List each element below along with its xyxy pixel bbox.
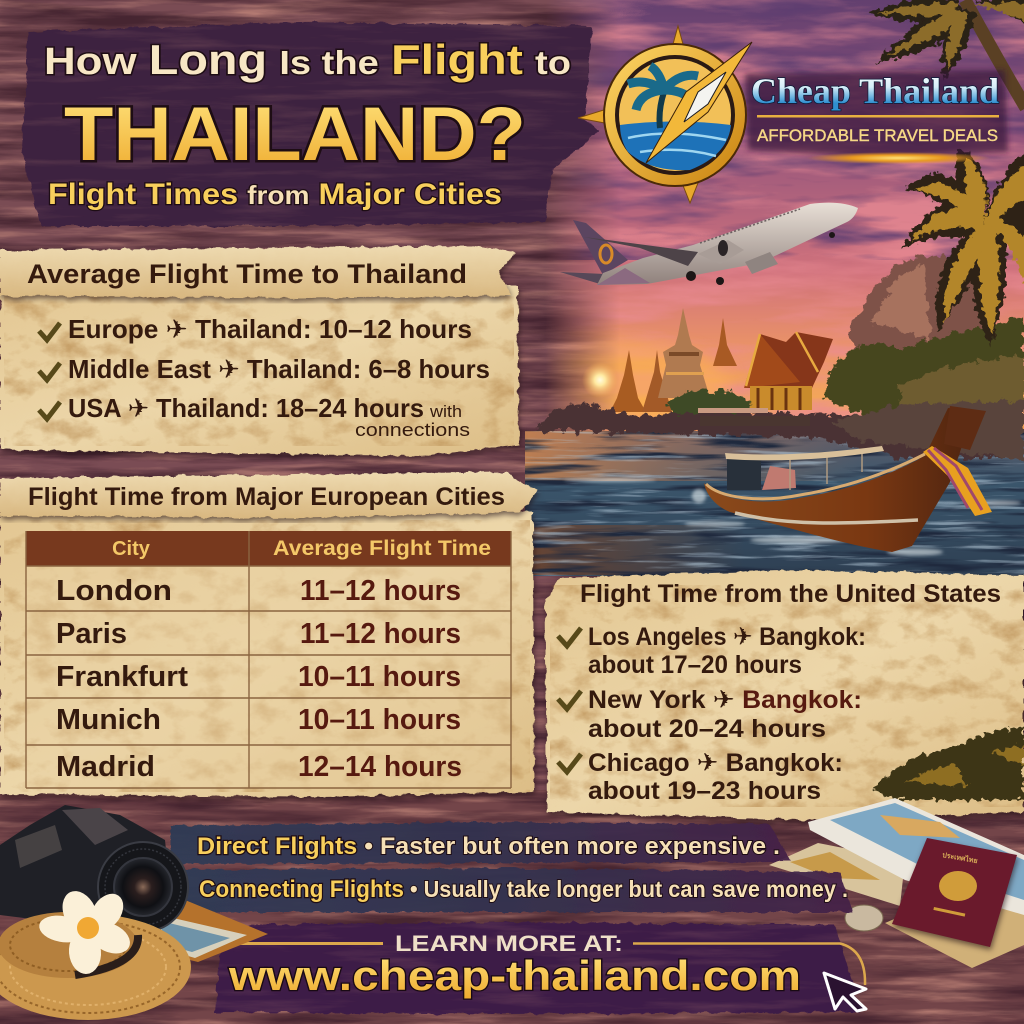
background: sunset sky (0, 0, 1024, 440)
parchment (0, 285, 519, 456)
panel: major European cities (0, 472, 537, 797)
rock shoreline (535, 404, 1024, 458)
item: Los Angeles (588, 622, 866, 679)
compass badge (578, 26, 752, 203)
left rule (232, 942, 383, 945)
temple spires (610, 308, 737, 412)
icon: palm tree right (900, 148, 1024, 346)
title line 2: THAILAND? (64, 92, 526, 177)
right rule with curve (633, 944, 865, 985)
palm on badge (660, 92, 664, 128)
fuselage (597, 203, 858, 285)
bottom wooden table (0, 790, 1024, 1024)
heading banner (0, 246, 516, 298)
band: direct flights (170, 822, 790, 864)
icon: longtail boat (704, 406, 992, 552)
title line 3: Flight Times from Major Cities (48, 178, 502, 211)
row: London: 11–12 hours (300, 575, 461, 607)
item: New York (588, 685, 862, 743)
tagline rule (757, 115, 999, 118)
table header (26, 531, 511, 566)
panel: United States flights (545, 570, 1024, 820)
background: weathered wood planks on the left (0, 0, 620, 800)
shore rocks (830, 400, 1024, 460)
title backdrop (22, 22, 600, 226)
sea foam (564, 478, 1021, 556)
row: Madrid (56, 751, 462, 783)
checks (39, 323, 60, 419)
note: with connections: connections (355, 420, 470, 440)
heading: Flight Time from the United States (580, 580, 1001, 608)
sea (525, 431, 1024, 576)
icon: passport: ประเทศไทย (942, 850, 978, 865)
wordmark backdrop (745, 70, 1008, 158)
note: with connections: with (429, 402, 462, 421)
plant foliage (872, 728, 1024, 800)
map booklet (808, 798, 1024, 915)
icon: camera (0, 805, 188, 932)
limestone cliff and jungle (825, 254, 1024, 460)
parchment (0, 512, 534, 797)
row: Paris: 11–12 hours (300, 618, 461, 650)
icon: straw hat (0, 912, 191, 1020)
row: Madrid: Madrid (56, 751, 155, 783)
lower map (885, 895, 1024, 968)
panel: average flight time (0, 246, 519, 456)
camera, hat and flower (0, 805, 268, 1020)
icon: plumeria flower (37, 885, 135, 975)
learn more panel (215, 920, 866, 1016)
maps, tablet and passport (769, 798, 1024, 968)
item: Chicago: Chicago ✈ Bangkok: (588, 748, 843, 777)
band: connecting flights (175, 868, 852, 912)
low trees (668, 390, 752, 420)
folded map (769, 843, 905, 906)
row: Frankfurt: Frankfurt (56, 661, 188, 693)
backdrop (215, 922, 860, 1014)
row: Frankfurt: 10–11 hours (298, 661, 461, 693)
title panel (20, 20, 605, 230)
parchment (545, 570, 1024, 820)
far wing (584, 237, 698, 266)
tail fin (573, 220, 628, 275)
tip: connecting: Connecting Flights • Usually take longer but can save money . (199, 876, 848, 903)
stilted pier (698, 408, 768, 413)
item: Middle East: Middle East ✈ Thailand: 6–8 hours (68, 354, 490, 385)
row: Paris: Paris (56, 618, 127, 650)
item: New York: about 20–24 hours (588, 715, 826, 743)
ribbons (923, 446, 992, 516)
row: London: London (56, 575, 172, 607)
row: London (56, 575, 461, 607)
item: Chicago (588, 748, 843, 805)
heading: Average Flight Time to Thailand (27, 259, 467, 289)
orange cloth (150, 900, 268, 962)
row: Munich: Munich (56, 704, 161, 736)
tagline: AFFORDABLE TRAVEL DEALS (757, 126, 998, 145)
item: Los Angeles: Los Angeles ✈ Bangkok: (588, 622, 866, 651)
distant temples and shoreline (535, 308, 1024, 458)
title line 1: How Long Is the Flight to (44, 36, 571, 83)
table (26, 531, 511, 788)
table: City (112, 538, 151, 560)
icon: palm tree top right (868, 0, 1024, 108)
icon: airplane (560, 203, 858, 285)
cliff (848, 254, 1000, 380)
note: with connections (355, 402, 470, 440)
canopy (725, 446, 884, 490)
item: Los Angeles: about 17–20 hours (588, 651, 802, 679)
tip: direct: Direct Flights • Faster but often more expensive . (197, 833, 780, 860)
logo: Cheap Thailand (578, 26, 1008, 203)
row: Munich: 10–11 hours (298, 704, 461, 736)
row: Madrid: 12–14 hours (298, 751, 462, 783)
tips band (170, 822, 852, 912)
tail plane (560, 272, 622, 284)
wordmark: Cheap Thailand (751, 71, 999, 111)
item: Chicago: about 19–23 hours (588, 777, 821, 805)
jungle (825, 318, 1024, 430)
learn more label: LEARN MORE AT: (395, 931, 623, 956)
url: www.cheap-thailand.com (228, 952, 801, 999)
icon: passport (892, 838, 1017, 947)
sun (582, 362, 618, 398)
table: Average Flight Time (273, 537, 491, 560)
gold glow (806, 152, 990, 164)
row: Paris (56, 618, 461, 650)
engines (698, 240, 744, 264)
coin (845, 905, 883, 931)
orange temple hall (744, 332, 833, 410)
hull (704, 408, 974, 552)
map (150, 915, 247, 958)
heading banner (0, 472, 537, 518)
icon: cursor (824, 973, 866, 1011)
row: Munich (56, 704, 461, 736)
row: Frankfurt (56, 661, 461, 693)
item: Europe: Europe ✈ Thailand: 10–12 hours (68, 314, 472, 345)
heading: Flight Time from Major European Cities (28, 483, 505, 511)
item: USA: USA ✈ Thailand: 18–24 hours (68, 393, 424, 424)
checks (558, 628, 581, 772)
item: New York: New York ✈ Bangkok: (588, 685, 862, 714)
compass needle with feather (646, 42, 752, 163)
